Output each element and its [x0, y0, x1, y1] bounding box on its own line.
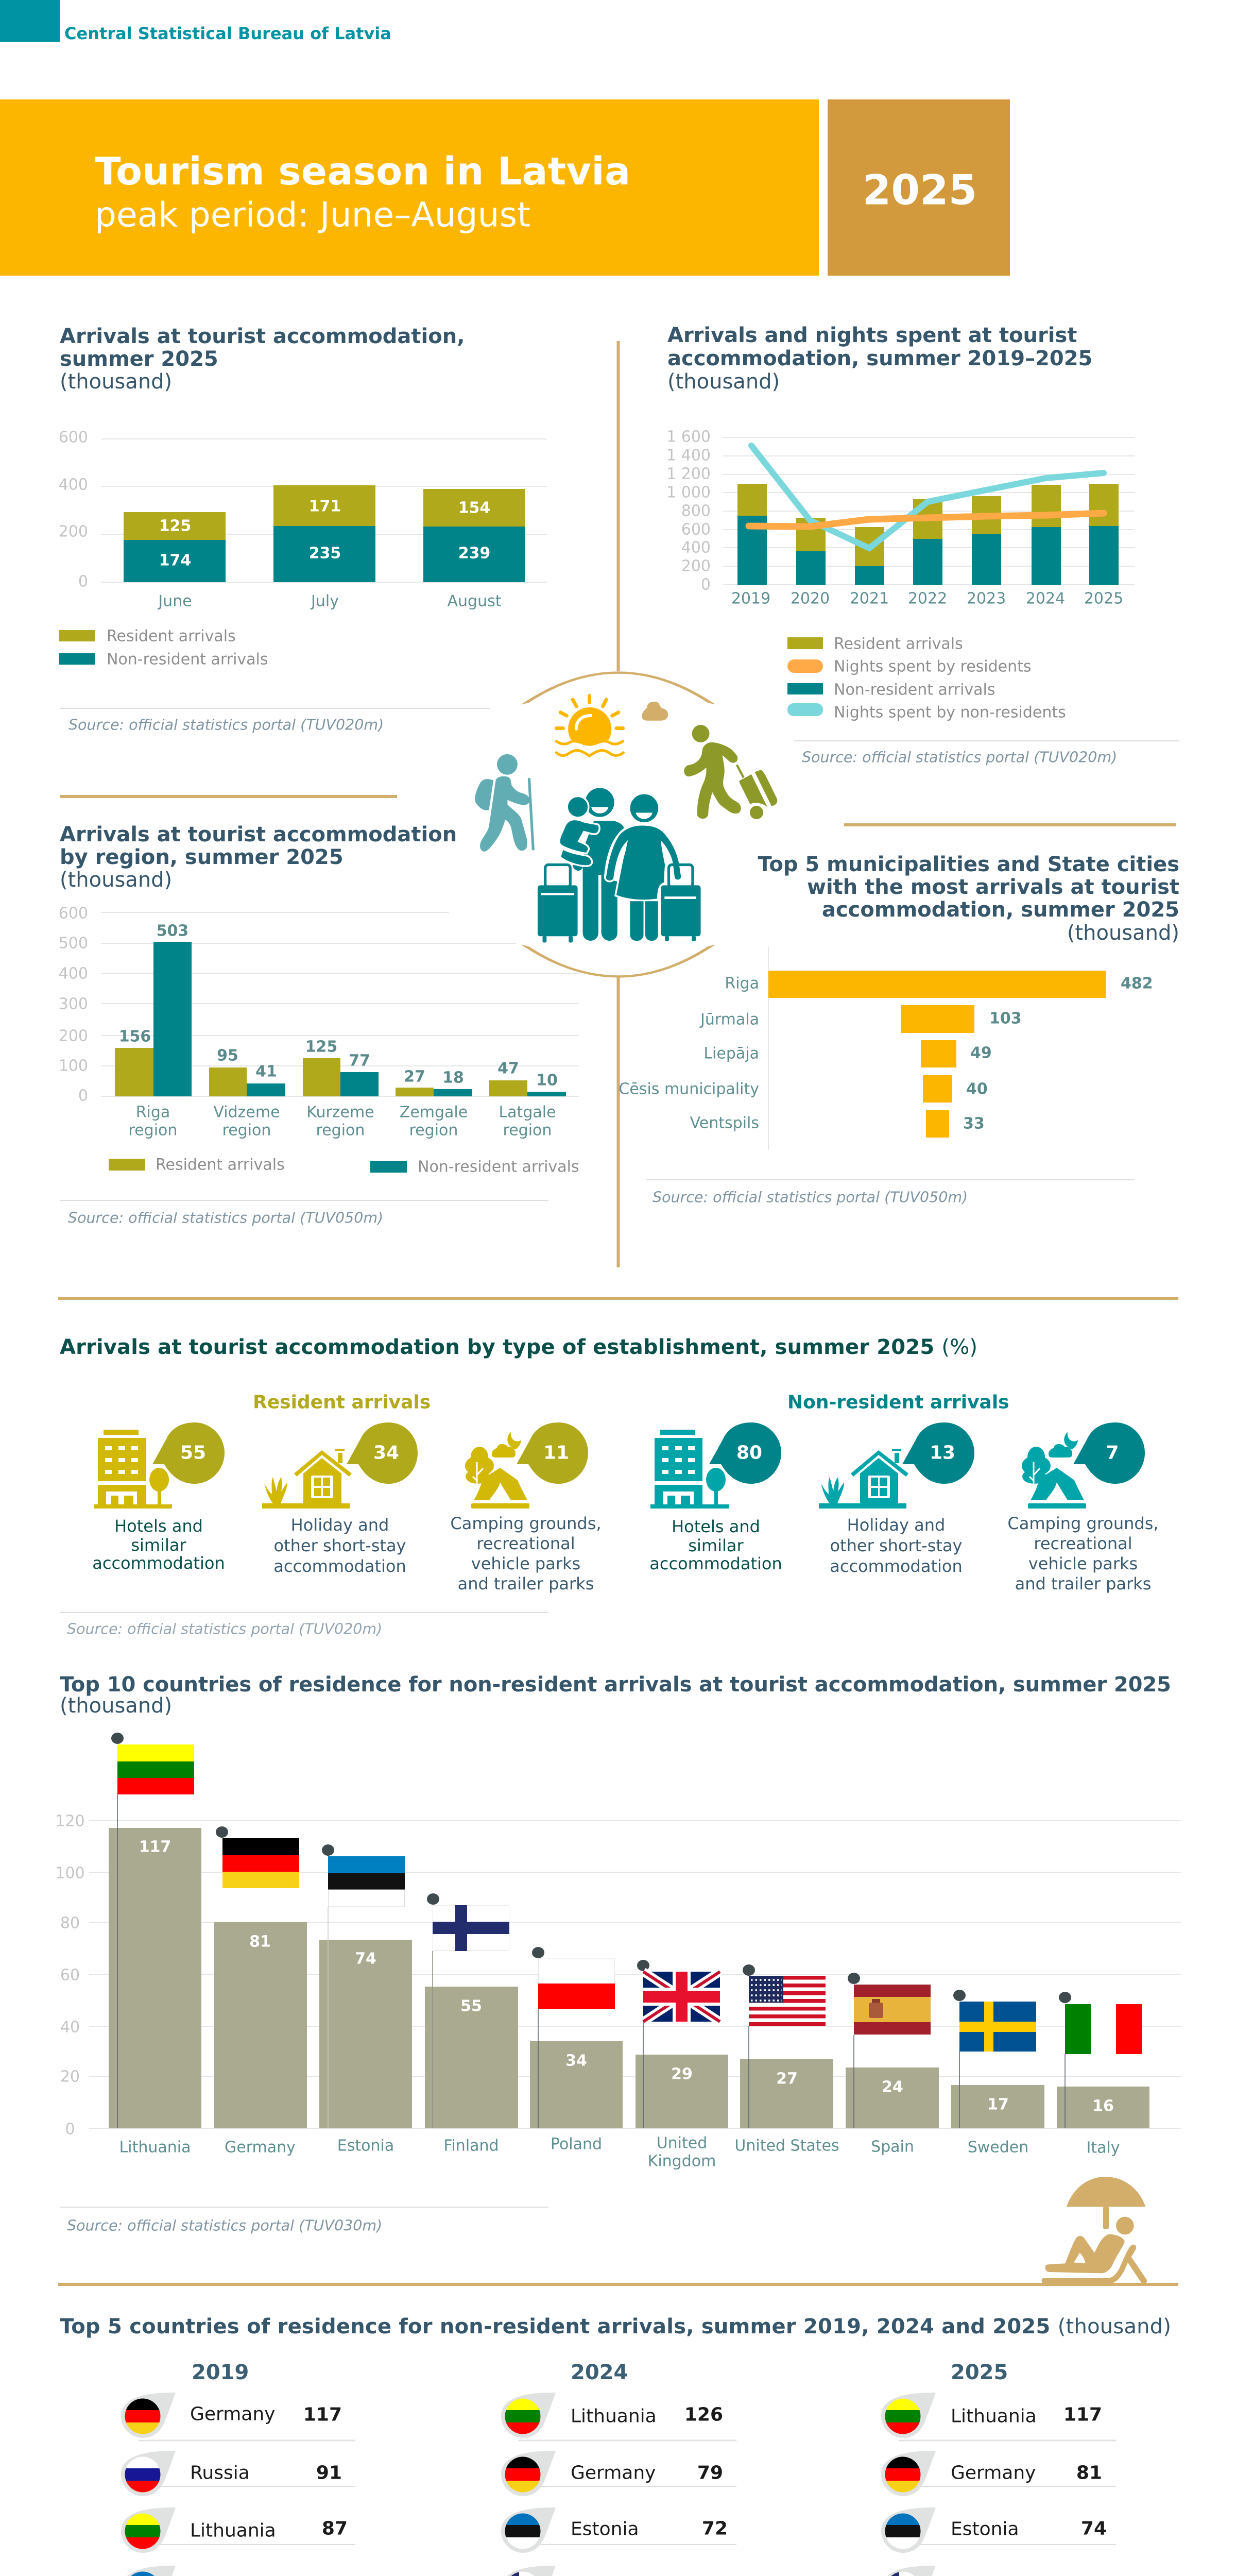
combo chart: 2025 [1084, 589, 1123, 608]
bar chart with flags: Kingdom [648, 2153, 716, 2170]
panel: top 5 municipalities [619, 853, 1179, 1206]
combo chart: 2019 [731, 589, 770, 608]
funnel bar chart: Cēsis municipality [619, 1080, 759, 1098]
stacked bar chart: 200 [59, 522, 88, 541]
item: non-resident holiday 13: other short-stay [830, 1536, 962, 1555]
column: 2024: Lithuania [571, 2406, 657, 2427]
clustered bar chart: Zemgale [400, 1104, 468, 1121]
heading: Arrivals at tourist accommodation, [60, 325, 465, 348]
panel: top 10 countries [55, 1673, 1181, 2283]
bar chart with flags: 117 [139, 1838, 171, 1856]
heading [667, 324, 1092, 394]
funnel bar chart: Ventspils [690, 1114, 759, 1132]
stacked bar chart: 171 [309, 498, 341, 515]
flag: United States [749, 1976, 826, 2026]
bar chart with flags: Germany [225, 2138, 296, 2157]
column: 2024: 72 [702, 2518, 728, 2539]
funnel bar chart: 33 [963, 1115, 985, 1132]
legend: Non-resident arrivals [418, 1158, 579, 1176]
combo chart: 800 [681, 502, 711, 520]
bar chart with flags: 80 [60, 1914, 80, 1932]
combo chart: 2020 [791, 589, 830, 608]
column: 2019: 87 [322, 2518, 348, 2539]
bar chart with flags: Spain [871, 2138, 914, 2156]
column: 2024: Estonia [571, 2518, 639, 2540]
bar chart with flags: 81 [249, 1933, 271, 1951]
item: non-resident hotels 80 [649, 1422, 782, 1573]
column: 2025: 74 [1081, 2518, 1107, 2539]
bar chart with flags: Finland [443, 2137, 499, 2155]
stacked bar chart: 125 [159, 517, 191, 535]
combo chart: 2023 [967, 589, 1006, 608]
bar chart with flags: 0 [65, 2121, 75, 2138]
heading: Arrivals at tourist accommodation by type of establishment, summer 2025 (%) [60, 1335, 977, 1359]
stacked bar chart: August [447, 592, 502, 610]
combo chart: 2022 [908, 589, 947, 608]
heading: Arrivals at tourist accommodation [60, 823, 457, 846]
panel: arrivals by type of establishment [60, 1335, 1159, 1637]
heading: Arrivals and nights spent at tourist [667, 324, 1077, 347]
item: resident camping 11: vehicle parks [471, 1554, 580, 1573]
item: non-resident camping 7 [1007, 1422, 1159, 1594]
stacked bar chart [59, 429, 547, 610]
clustered bar chart: 200 [59, 1027, 88, 1045]
source: Source: official statistics portal (TUV030m) [67, 2217, 382, 2234]
bar chart with flags: United States [734, 2137, 839, 2155]
bar chart with flags: 24 [882, 2078, 903, 2096]
item: resident holiday 34: Holiday and [291, 1515, 389, 1535]
icon: family with luggage [538, 788, 701, 942]
item: resident holiday 34: other short-stay [274, 1536, 406, 1555]
column: 2019: Russia [190, 2463, 250, 2483]
clustered bar chart: 47 [497, 1059, 519, 1078]
stacked bar chart: 400 [59, 476, 88, 494]
flag: Sweden [959, 2002, 1036, 2052]
heading: (thousand) [667, 370, 780, 394]
funnel bar chart: 49 [970, 1044, 992, 1062]
column: 2025: 117 [1063, 2404, 1102, 2426]
combo chart: 1 200 [666, 465, 711, 483]
heading: by region, summer 2025 [60, 845, 344, 869]
funnel bar chart [619, 947, 1153, 1150]
column: 2025: 2025 [951, 2361, 1008, 2384]
flag: Germany [222, 1838, 299, 1888]
clustered bar chart: Vidzeme [213, 1104, 280, 1121]
combo chart: 2021 [850, 589, 889, 608]
column: 2024 [501, 2361, 736, 2576]
item: resident hotels 55: 55 [180, 1443, 206, 1463]
column: 2019: 117 [303, 2404, 342, 2426]
legend: Nights spent by non-residents [834, 704, 1066, 721]
year badge: 2025 [863, 166, 977, 214]
item: resident holiday 34: accommodation [273, 1556, 406, 1576]
bar chart with flags: 16 [1092, 2097, 1114, 2115]
clustered bar chart: 95 [217, 1047, 238, 1064]
bar chart with flags: 27 [776, 2070, 798, 2088]
clustered bar chart: 100 [59, 1057, 88, 1075]
legend: Non-resident arrivals [107, 650, 268, 669]
panel: arrivals summer 2025 [59, 325, 547, 734]
item: non-resident holiday 13 [819, 1422, 974, 1576]
source: Source: official statistics portal (TUV020m) [67, 1621, 382, 1637]
item: resident hotels 55: Hotels and [114, 1516, 203, 1536]
combo chart [666, 428, 1135, 608]
item: resident camping 11: 11 [543, 1443, 569, 1463]
source: Source: official statistics portal (TUV020m) [802, 749, 1117, 766]
heading: (thousand) [60, 1694, 172, 1718]
item: non-resident holiday 13: 13 [930, 1443, 955, 1463]
item: non-resident hotels 80: Hotels and [672, 1517, 760, 1536]
clustered bar chart: Kurzeme [306, 1104, 374, 1121]
legend [787, 635, 1066, 721]
bar chart with flags: 55 [460, 1997, 482, 2015]
clustered bar chart: 600 [59, 905, 88, 922]
legend [59, 628, 268, 669]
bar chart with flags: United [657, 2134, 707, 2153]
title banner: peak period: June–August [95, 195, 530, 235]
column: 2025: Estonia [951, 2518, 1019, 2540]
heading [60, 325, 465, 394]
year badge [828, 99, 1010, 276]
item: non-resident camping 7: Camping grounds, [1007, 1514, 1159, 1533]
combo chart: 2024 [1026, 589, 1065, 608]
legend: Resident arrivals [156, 1156, 285, 1174]
combo chart: 200 [681, 557, 711, 575]
panel: arrivals by region [59, 823, 579, 1226]
title banner: Tourism season in Latvia [95, 149, 630, 194]
clustered bar chart: 10 [536, 1072, 558, 1089]
clustered bar chart: 400 [59, 964, 88, 983]
item: non-resident hotels 80: 80 [736, 1443, 762, 1463]
item: resident camping 11: Camping grounds, [450, 1514, 602, 1533]
item: resident hotels 55: similar [131, 1535, 186, 1555]
column: 2019: 91 [316, 2463, 342, 2483]
column: 2019: Germany [190, 2404, 275, 2425]
clustered bar chart: 0 [78, 1087, 88, 1105]
panel: top 5 countries by year [60, 2315, 1171, 2576]
bar chart with flags: 20 [60, 2068, 80, 2086]
subheading: resident arrivals: Resident arrivals [253, 1392, 431, 1413]
heading [60, 1673, 1171, 1718]
stacked bar chart: June [157, 592, 192, 610]
heading: with the most arrivals at tourist [807, 875, 1179, 899]
item: non-resident camping 7: and trailer parks [1015, 1574, 1151, 1594]
item: non-resident hotels 80: similar [688, 1536, 744, 1555]
bar chart with flags: Lithuania [119, 2138, 191, 2157]
source: Source: official statistics portal (TUV020m) [68, 716, 384, 734]
heading: (thousand) [1067, 921, 1179, 945]
logo: Central Statistical Bureau of Latvia: Central Statistical Bureau of Latvia [64, 24, 391, 43]
source: Source: official statistics portal (TUV050m) [653, 1189, 968, 1206]
item: resident hotels 55 [92, 1422, 225, 1573]
bar chart with flags: 40 [60, 2019, 80, 2036]
bar chart with flags: 17 [987, 2096, 1009, 2113]
clustered bar chart: region [316, 1121, 365, 1140]
flag: Spain [854, 1985, 931, 2035]
flag: Italy [1065, 2004, 1142, 2054]
stacked bar chart: 154 [458, 499, 490, 517]
clustered bar chart: Latgale [499, 1104, 556, 1121]
flag: Estonia [328, 1856, 405, 1907]
combo chart: 1 600 [666, 428, 711, 446]
heading: Top 10 countries of residence for non-resident arrivals at tourist accommodation, summer 2025 [60, 1673, 1171, 1697]
clustered bar chart: 18 [442, 1069, 464, 1087]
clustered bar chart: 77 [349, 1052, 370, 1070]
column: 2019: 2019 [192, 2361, 249, 2384]
clustered bar chart: region [222, 1121, 271, 1140]
stacked bar chart: July [310, 592, 339, 610]
flag: Lithuania [117, 1744, 194, 1794]
item: non-resident camping 7: vehicle parks [1028, 1554, 1138, 1573]
clustered bar chart: 156 [119, 1027, 151, 1046]
clustered bar chart: 500 [59, 935, 88, 952]
source: Source: official statistics portal (TUV050m) [68, 1210, 383, 1226]
combo chart: 400 [681, 539, 711, 556]
clustered bar chart: 125 [305, 1038, 337, 1056]
title banner [0, 99, 819, 276]
stacked bar chart: 600 [59, 429, 88, 446]
legend: Resident arrivals [107, 628, 236, 645]
funnel bar chart: Jūrmala [699, 1011, 759, 1028]
bar chart with flags: 100 [55, 1864, 85, 1883]
legend: Nights spent by residents [834, 657, 1032, 676]
flag: United Kingdom [643, 1972, 720, 2022]
bar chart with flags: Poland [551, 2135, 602, 2154]
heading: Top 5 municipalities and State cities [758, 853, 1179, 876]
combo chart: 1 000 [666, 483, 711, 502]
clustered bar chart: 503 [157, 922, 188, 940]
column: 2025: Lithuania [951, 2406, 1037, 2427]
icon group: travellers in ring [475, 671, 777, 978]
icon: traveller with suitcase [684, 725, 777, 819]
item: non-resident holiday 13: Holiday and [847, 1515, 945, 1535]
panel: arrivals and nights 2019-2025 [666, 324, 1179, 766]
bar chart with flags: 34 [565, 2052, 587, 2070]
heading: accommodation, summer 2025 [822, 898, 1179, 922]
funnel bar chart: Liepāja [703, 1045, 759, 1062]
item: resident holiday 34: 34 [373, 1443, 399, 1463]
bar chart with flags: Sweden [968, 2138, 1028, 2157]
clustered bar chart: region [409, 1121, 458, 1140]
funnel bar chart: Riga [725, 975, 759, 992]
heading: (thousand) [60, 370, 172, 394]
clustered bar chart [59, 905, 579, 1140]
item: non-resident camping 7: recreational [1034, 1534, 1132, 1553]
column: 2025: 81 [1076, 2463, 1102, 2483]
item: resident camping 11 [450, 1422, 602, 1594]
stacked bar chart: 0 [78, 573, 88, 590]
column: 2025 [881, 2361, 1116, 2576]
column: 2019: Lithuania [190, 2520, 276, 2541]
icon: sun over water [556, 696, 623, 756]
item: non-resident holiday 13: accommodation [830, 1556, 963, 1576]
bar chart with flags: Italy [1086, 2139, 1120, 2157]
item: non-resident hotels 80: accommodation [649, 1554, 782, 1573]
subheading: non-resident arrivals: Non-resident arrivals [787, 1392, 1009, 1413]
icon: person on sunbed under umbrella [1041, 2177, 1147, 2283]
heading: accommodation, summer 2019–2025 [667, 347, 1092, 370]
flag: Finland [433, 1905, 509, 1951]
item: resident holiday 34 [262, 1422, 418, 1576]
icon: hiker [475, 754, 533, 852]
legend: Non-resident arrivals [834, 681, 995, 699]
bar chart with flags: Estonia [337, 2137, 394, 2155]
combo chart: 0 [701, 576, 711, 594]
legend [109, 1156, 579, 1176]
clustered bar chart: 41 [255, 1062, 277, 1081]
column: 2024: 2024 [571, 2361, 628, 2384]
clustered bar chart: 27 [404, 1067, 425, 1086]
bar chart with flags: 120 [55, 1812, 85, 1830]
combo chart: 1 400 [666, 446, 711, 465]
funnel bar chart: 482 [1121, 975, 1153, 992]
clustered bar chart: 300 [59, 995, 88, 1013]
bar chart with flags [55, 1733, 1181, 2170]
item: resident camping 11: recreational [476, 1534, 575, 1553]
item: resident hotels 55: accommodation [92, 1553, 225, 1573]
column: 2025: Germany [951, 2463, 1036, 2483]
bar chart with flags: 29 [671, 2065, 693, 2083]
clustered bar chart: Riga [136, 1104, 170, 1121]
clustered bar chart: region [503, 1121, 552, 1140]
stacked bar chart: 239 [458, 544, 490, 563]
heading [758, 853, 1179, 945]
heading: summer 2025 [60, 347, 218, 371]
heading: (thousand) [60, 868, 172, 892]
bar chart with flags: 60 [60, 1966, 80, 1985]
logo: Central Statistical Bureau of Latvia [0, 0, 391, 43]
bar chart with flags: 74 [355, 1950, 376, 1968]
funnel bar chart: 40 [966, 1080, 988, 1098]
column: 2019 [121, 2361, 355, 2576]
column: 2024: Germany [571, 2463, 656, 2483]
combo chart: 600 [681, 520, 711, 539]
funnel bar chart: 103 [989, 1010, 1022, 1027]
legend: Resident arrivals [834, 635, 963, 653]
column: 2024: 126 [684, 2404, 723, 2426]
heading: Top 5 countries of residence for non-resident arrivals, summer 2019, 2024 and 2025 (thousand) [60, 2315, 1171, 2338]
item: resident camping 11: and trailer parks [458, 1574, 594, 1594]
icon: cloud [642, 702, 668, 721]
flag: Poland [538, 1959, 615, 2009]
heading [60, 823, 457, 892]
column: 2024: 79 [697, 2463, 723, 2483]
stacked bar chart: 174 [159, 551, 191, 570]
clustered bar chart: region [129, 1121, 177, 1140]
stacked bar chart: 235 [309, 544, 341, 563]
item: non-resident camping 7: 7 [1106, 1443, 1119, 1463]
